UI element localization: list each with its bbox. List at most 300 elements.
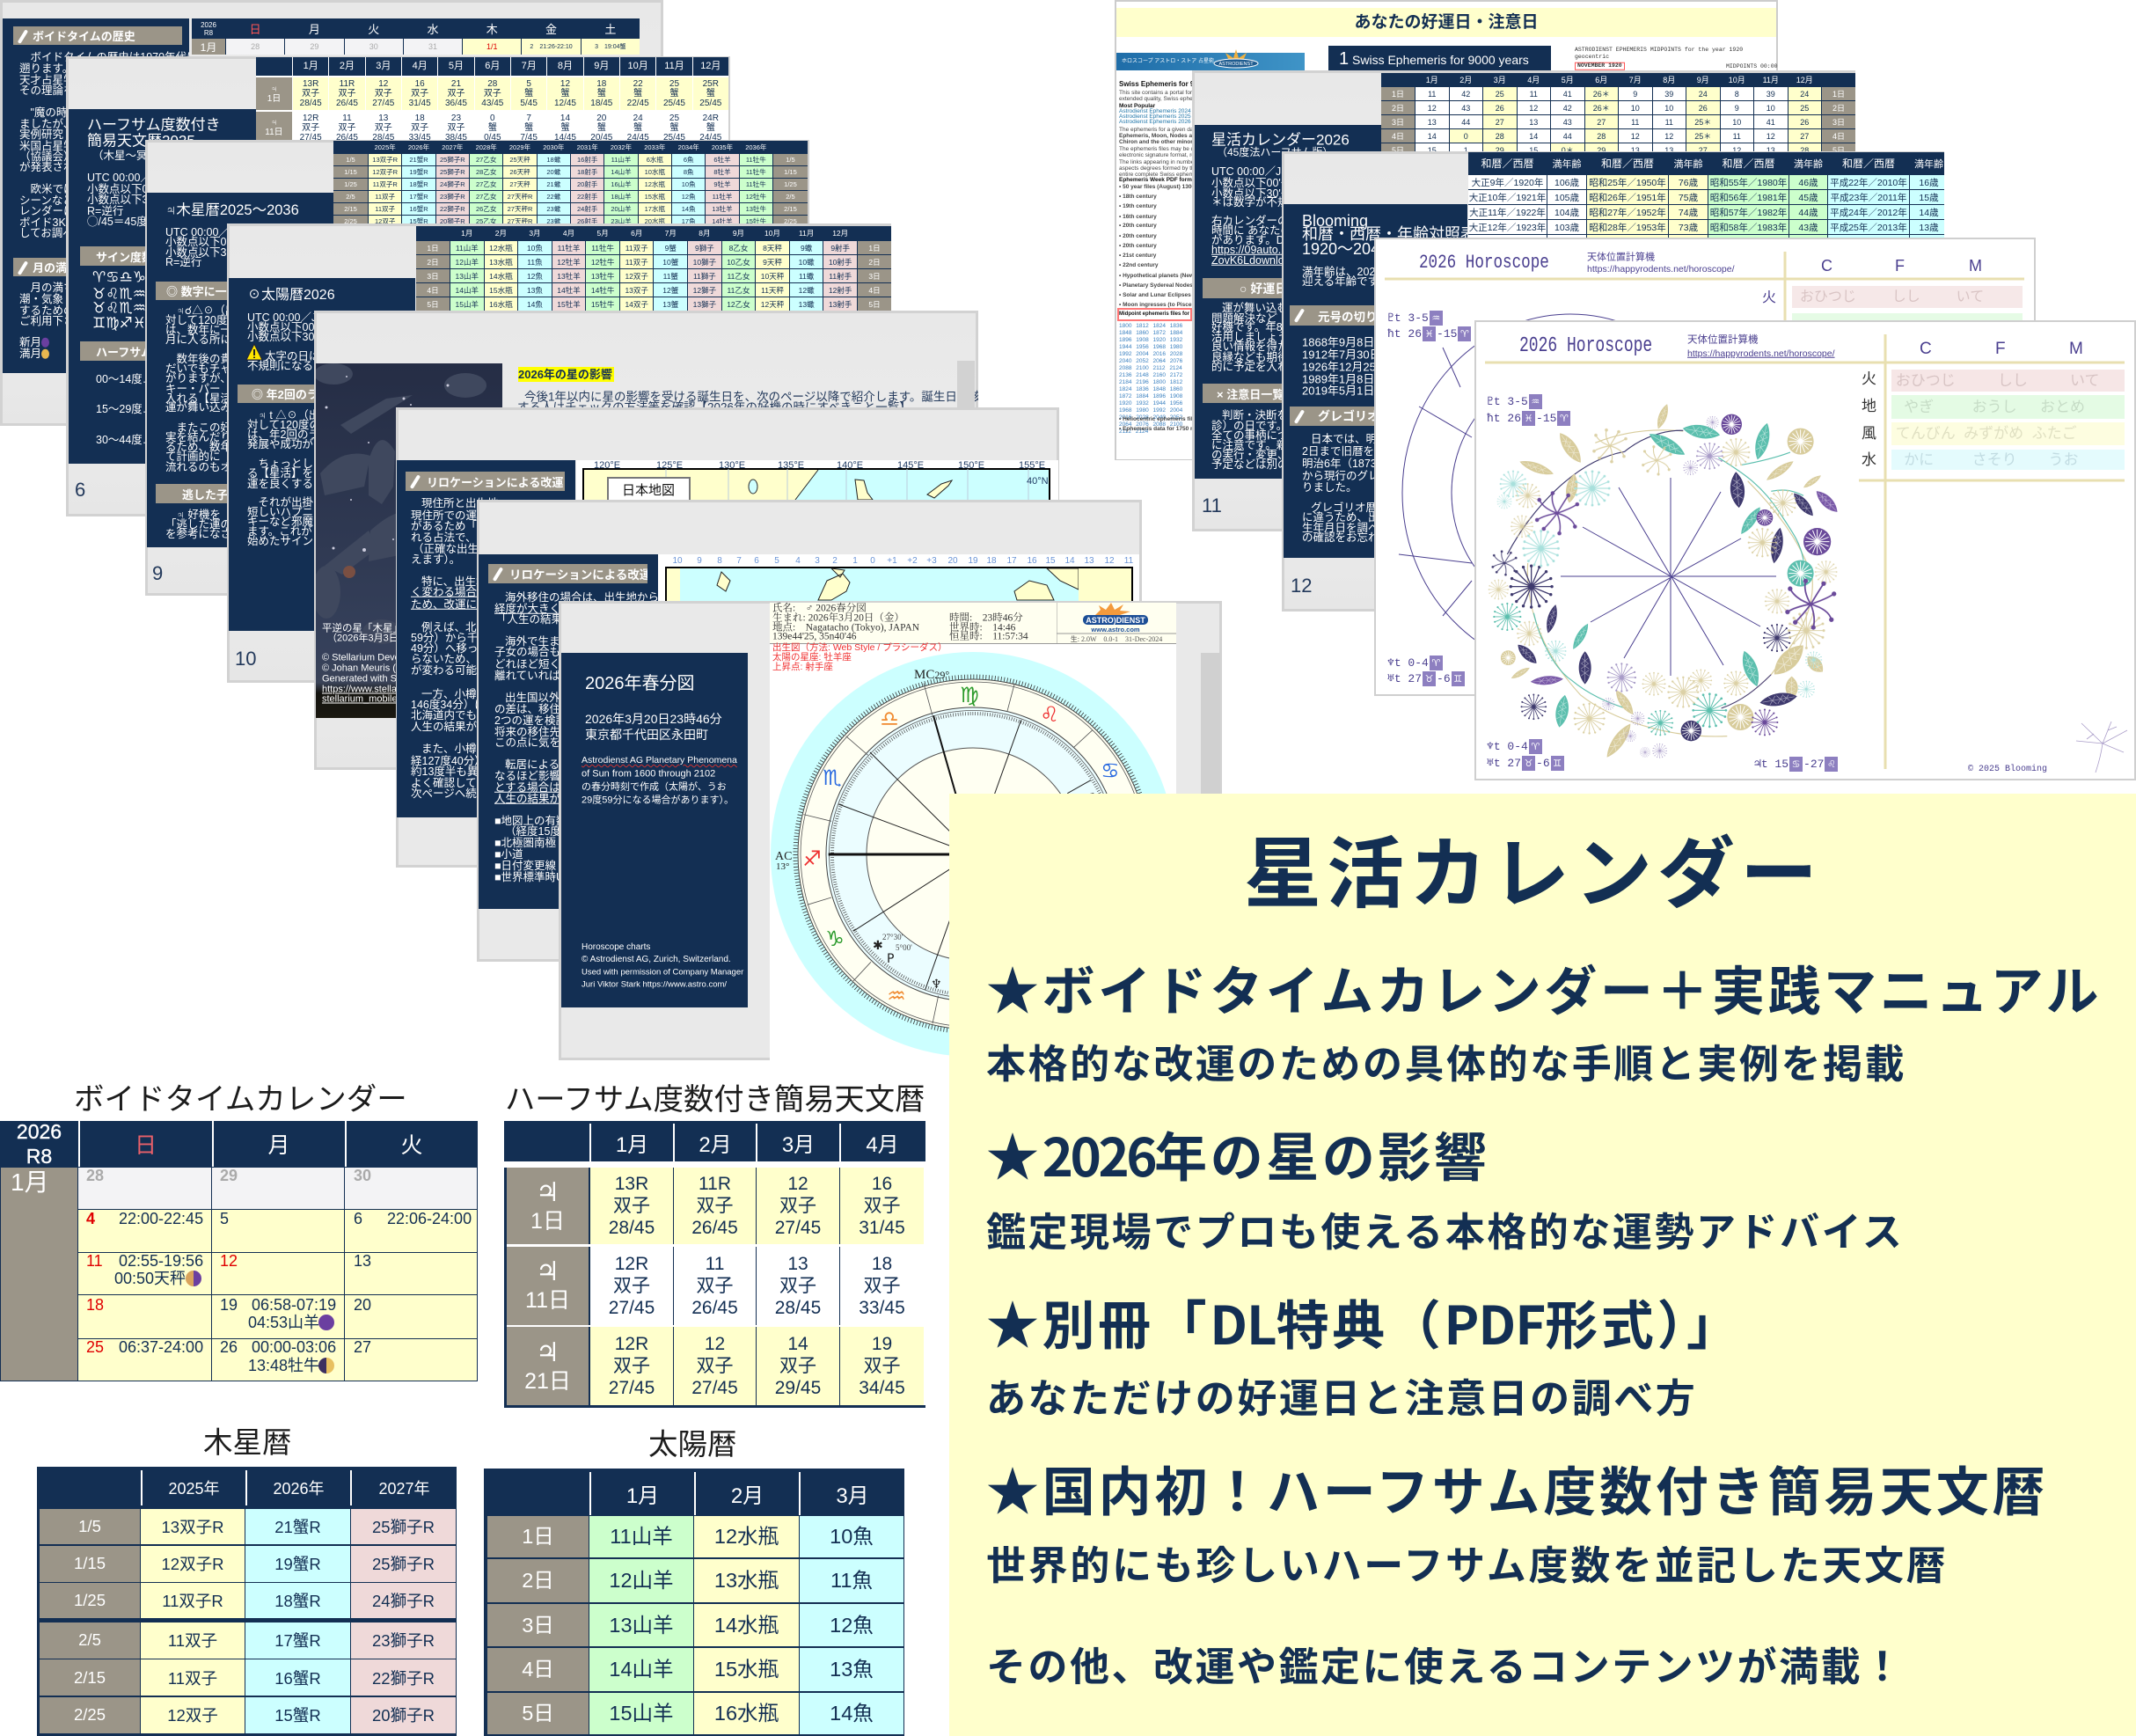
label: F: F [1895, 257, 1905, 275]
panel: activity calendar text column: （45度法ハーフサム版） [1217, 146, 1333, 158]
calendar thumbnail: 2026 R8 [201, 21, 216, 37]
lucky day table thumbnail: 12月 [1796, 76, 1813, 84]
panel: lucky days sheet: geocentric [1575, 54, 1609, 60]
chart: horoscope wheel: ♋ [1101, 758, 1120, 783]
calendar grid: 1月 [11, 1168, 49, 1196]
web page thumbnail: astrodienst: The ephemeris for a given date contains the right [1119, 127, 1243, 133]
sun table thumbnail: 11牡羊 [558, 243, 580, 252]
heading: half-sum almanac: ハーフサム度数付き簡易天文暦 [505, 1083, 925, 1117]
panel: half-sum text column: ハーフサム度数付き [87, 116, 221, 134]
web page thumbnail: astrodienst: Astrodienst Ephemeris 2025 [1119, 114, 1191, 120]
web page thumbnail: astrodienst: extended quality, Swiss ephemeris files for users of [1119, 96, 1248, 102]
panel: sun text column: 始めたサイン [247, 535, 313, 547]
panel: age conversion text column: 明治6年（1873） [1302, 458, 1387, 470]
calendar thumbnail: 28 [251, 42, 260, 51]
lucky day table thumbnail [1381, 73, 1855, 152]
panel: half-sum text column: ◯/45＝45度法 [87, 216, 158, 228]
lucky day table thumbnail: 8月 [1663, 76, 1675, 84]
panel: half-sum text column: 15～29度… [96, 403, 153, 415]
text: outer planets: ♈ [1460, 328, 1469, 340]
calendar thumbnail: 水 [427, 23, 438, 36]
sun table thumbnail: 13蟹 [662, 299, 678, 308]
table body: 4日 [522, 1658, 554, 1681]
sun table thumbnail: 3日 [427, 271, 439, 280]
jupiter table thumbnail: 28乙女 [476, 168, 496, 176]
panel: activity calendar text column: 時間に あなたの [1211, 224, 1291, 237]
sun table thumbnail: 8月 [699, 229, 710, 238]
web page thumbnail: astrodienst: • Solar and Lunar Eclipses [1119, 292, 1191, 298]
lucky day table thumbnail: 27 [1597, 118, 1606, 127]
heading: relocation world [488, 564, 647, 583]
half-sum table thumbnail: 1月 [304, 61, 318, 71]
panel: horoscope front sheet: https://happyrodents.net/horoscope/ [1687, 348, 1835, 359]
panel: activity calendar text column [1195, 125, 1381, 479]
jupiter table thumbnail: 2028年 [476, 143, 497, 151]
lucky day table thumbnail: 10 [1664, 104, 1673, 113]
panel: spring equinox sheet: 上昇点: 射手座 [772, 662, 833, 672]
lucky day table thumbnail: 41 [1767, 118, 1775, 127]
half-sum table thumbnail: 25 蟹 25/45 [663, 79, 685, 108]
panel: spring equinox sheet [559, 601, 1222, 1060]
panel: 2026 star influence sheet: Generated with Stellarium [322, 674, 434, 685]
age table thumbnail: 平成22年／2010年 [1830, 178, 1907, 188]
table header: 2026年 [273, 1480, 325, 1498]
panel: void time text column: 月の満ち [30, 282, 75, 294]
panel: half-sum text column: ♉♌♏♒ [92, 285, 146, 303]
calendar thumbnail: 日 [250, 23, 261, 36]
panel: horoscope back sheet: 天体位置計算機 [1587, 252, 1655, 262]
table body [507, 1168, 925, 1405]
heading: sign degrees: サイン度数 [96, 250, 153, 264]
jupiter table thumbnail: 11双子 [375, 205, 395, 213]
age table thumbnail: 106歳 [1554, 178, 1579, 188]
table body: 12 双子 27/45 [691, 1334, 738, 1398]
logo: astrodienst [1057, 603, 1176, 643]
map: world: +2 [907, 556, 918, 566]
age table thumbnail: 大正9年／1920年 [1472, 178, 1543, 188]
table body: 5日 [522, 1702, 554, 1725]
web page thumbnail: astrodienst: • 16th century [1119, 214, 1157, 220]
jupiter table thumbnail: 18射手 [577, 168, 597, 176]
jupiter table thumbnail: 1/5 [346, 156, 355, 164]
heading: lucky day [1203, 278, 1372, 298]
lucky day table thumbnail: 39 [1664, 90, 1673, 99]
sun table thumbnail: 11双子 [625, 257, 648, 266]
chart: horoscope wheel: ♎ [880, 707, 899, 731]
panel: activity calendar text column: 良縁なども期待 [1211, 351, 1289, 363]
logo: astrodienst: www.astro.com [1090, 626, 1140, 634]
panel: void time text column: （協議会） [19, 150, 75, 163]
lucky day table thumbnail: 24 [1699, 90, 1708, 99]
sun table thumbnail: 10獅子 [693, 257, 716, 266]
calendar grid: 火 [400, 1133, 422, 1158]
table body: 12山羊 [609, 1569, 674, 1592]
panel: relocation world text column: ■小道 [494, 848, 523, 861]
half-sum table thumbnail: 13R 双子 28/45 [300, 79, 322, 108]
lucky day table thumbnail: 41 [1563, 90, 1572, 99]
table body: ♃ [536, 1177, 560, 1207]
label: M: M [1969, 257, 1982, 275]
panel: 2026 star influence sheet: する人はチェックの方法等を確認【2026年の好機の時にすべきこと一覧】 [517, 400, 911, 414]
jupiter table thumbnail: 2/25 [784, 217, 797, 225]
chart: horoscope wheel: ♆ [931, 978, 942, 992]
panel: spring equinox sheet: 出生図（方法: Web Style / プラシーダス） [772, 642, 947, 653]
panel: half-sum text column: ♈♋♎♑ [92, 269, 146, 287]
sun table thumbnail: 16水瓶 [489, 299, 513, 308]
panel: equinox text column: Juri Viktor Stark https://www.astro.com/ [582, 979, 727, 989]
map: world: 18 [986, 556, 997, 566]
sun table thumbnail: 12月 [832, 229, 848, 238]
map: world: 1 [852, 556, 858, 566]
lucky day table thumbnail: 1日 [1392, 90, 1404, 99]
sun table thumbnail: 3日 [868, 271, 881, 280]
panel: jupiter almanac table [37, 1467, 457, 1736]
chart: horoscope wheel: 5°00' [896, 943, 912, 952]
panel: activity calendar text column: 好機です。年8回 [1211, 321, 1293, 333]
panel: age conversion text column: 1912年7月30日 [1302, 348, 1381, 361]
jupiter table thumbnail: 2036年 [745, 143, 766, 151]
text: slow planets: ♆t 0-4 ♅t 27 -6 [1487, 740, 1550, 770]
table header: 2027年 [378, 1480, 430, 1498]
jupiter table thumbnail: 20蠍 [546, 168, 560, 176]
jupiter table thumbnail: 13双子R [372, 156, 398, 164]
map: japan: 150°E [958, 460, 984, 471]
lucky day table thumbnail: 28 [1496, 132, 1504, 141]
table body: 12 双子 27/45 [775, 1174, 821, 1238]
calendar thumbnail: 30 [369, 42, 378, 51]
map: world [658, 554, 1139, 601]
lucky day table thumbnail: 14 [1428, 132, 1437, 141]
title: star activity calendar: 星活カレンダー [1244, 812, 1823, 924]
page number: 9 [152, 562, 163, 584]
lucky day table thumbnail: 26 [1800, 118, 1809, 127]
map: world: +3 [926, 556, 937, 566]
lucky day table thumbnail: 4月 [1527, 76, 1540, 84]
band: earth signs [1792, 313, 2023, 324]
panel: sun almanac sheet [227, 223, 891, 683]
lucky day table thumbnail: 11 [1733, 132, 1741, 141]
sun table thumbnail: 1日 [427, 243, 439, 252]
heading: lucky day: ○ 好運日 [1240, 282, 1287, 296]
logo: astrodienst: ASTRO)DIENST [1086, 616, 1145, 625]
panel: void time text column: するための [19, 304, 75, 317]
jupiter table thumbnail: 12魚 [682, 193, 696, 201]
table body: 15山羊 [609, 1702, 674, 1725]
sun table thumbnail: 11双子 [625, 243, 648, 252]
calendar thumbnail: 1/1 [486, 42, 498, 51]
age table thumbnail: 74歳 [1679, 208, 1698, 218]
panel: age conversion sheet [1282, 151, 1944, 612]
panel: equinox text column: of Sun from 1600 through 2102 [582, 769, 715, 780]
panel: half-sum text column: 小数点以下30'～ [87, 194, 167, 206]
calendar thumbnail: 3 19:04蟹 [595, 44, 626, 50]
text: star influence body [517, 390, 978, 414]
table body: 23獅子R [372, 1631, 435, 1650]
half-sum table thumbnail: ♃ 1日 [267, 84, 281, 104]
panel: void time text column: "魔の時間" [30, 106, 82, 119]
panel: jupiter text column: キー・パー（ [165, 383, 231, 395]
lucky day table thumbnail: 13 [1428, 118, 1437, 127]
panel: relocation text column: らないため、引越 [411, 653, 499, 665]
panel: jupiter text column: ♃ 好機を [176, 509, 221, 521]
sun table thumbnail: 5月 [596, 229, 609, 238]
web page thumbnail: astrodienst: This site contains a portal for the download files in [1119, 90, 1246, 96]
sun table thumbnail: 6月 [631, 229, 642, 238]
panel: relocation world text column: 海外で生まれた [505, 635, 582, 648]
jupiter table thumbnail: 2026年 [408, 143, 429, 151]
panel: void time calendar table: 4 [86, 1210, 95, 1227]
sun table thumbnail: 14双子 [625, 299, 648, 308]
panel: activity calendar text column: 良い情報を得た [1211, 341, 1289, 353]
chart: blank horoscope wheel [1399, 313, 1615, 641]
jupiter table thumbnail: 23獅子R [440, 193, 465, 201]
lucky day table thumbnail: 13 [1529, 118, 1538, 127]
panel: age conversion text column: 1868年9月8日 [1302, 336, 1374, 348]
half-sum table thumbnail: 3月 [376, 61, 391, 71]
jupiter table thumbnail: 22蠍 [546, 193, 560, 201]
table body: 11 双子 26/45 [691, 1253, 738, 1318]
table header [37, 1470, 457, 1505]
panel: jupiter text column: ♃木星暦2025～2036 [165, 202, 299, 218]
panel: activity calendar text column: 活用しましょう。 [1211, 331, 1298, 343]
table body: 11双子 [168, 1668, 217, 1688]
lucky day table thumbnail: 42 [1461, 90, 1470, 99]
text: slow planets: ♊ [1453, 673, 1462, 685]
age table thumbnail: 104歳 [1554, 208, 1579, 218]
panel: jupiter text column: て計画的に [165, 450, 221, 463]
sun table thumbnail: 8乙女 [729, 243, 748, 252]
panel: equinox text column: Horoscope charts [582, 942, 650, 952]
panel: half-sum text column: UTC 00:00／JST 09:00 [87, 172, 201, 184]
age table thumbnail: 平成23年／2011年 [1831, 192, 1906, 202]
web page thumbnail: astrodienst: Astrodienst Ephemeris 2026 [1119, 119, 1191, 125]
map: world: 15 [1045, 556, 1056, 566]
sun table thumbnail: 15牡羊 [557, 299, 581, 308]
age table thumbnail: 満年齢 [1794, 158, 1823, 169]
lucky day table thumbnail: 11 [1631, 118, 1639, 127]
panel: relocation world text column: 将来の移住先など [494, 726, 582, 738]
jupiter table thumbnail: 1/25 [344, 180, 357, 188]
jupiter table thumbnail: 23蠍 [546, 217, 560, 225]
table body: 11双子R [162, 1592, 223, 1610]
chart: horoscope wheel: ✱ [873, 939, 883, 953]
map: world: 5 [774, 556, 779, 566]
heading: moon [13, 258, 182, 276]
table body: 12双子R [162, 1555, 223, 1573]
web page thumbnail: astrodienst: Most Popular [1119, 103, 1155, 109]
jupiter table thumbnail: 25獅子R [440, 156, 465, 164]
lucky day table thumbnail: 11 [1428, 90, 1436, 99]
sun table thumbnail: 10乙女 [727, 257, 750, 266]
jupiter table thumbnail: 1/5 [786, 156, 795, 164]
heading: missed luck: 逃した子 [182, 487, 228, 502]
panel: age conversion text column: グレゴリオ暦の [1311, 502, 1388, 514]
panel: jupiter text column: 小数点以下00'～ [165, 236, 245, 248]
age table thumbnail: 73歳 [1679, 222, 1698, 232]
sun table thumbnail: 10射手 [829, 257, 852, 266]
age table thumbnail: 45歳 [1798, 192, 1818, 202]
lucky day table thumbnail: 25 [1496, 90, 1504, 99]
table body: 16水瓶 [714, 1702, 779, 1725]
sun table thumbnail: 9射手 [830, 243, 850, 252]
chart: horoscope wheel: ♌ [1040, 702, 1059, 727]
table body: 2/5 [78, 1630, 101, 1649]
panel: void time calendar table: 11 [86, 1252, 103, 1270]
jupiter table thumbnail: 11山羊 [611, 156, 631, 164]
jupiter table thumbnail: 17魚 [682, 217, 696, 225]
jupiter table thumbnail: 26射手 [577, 217, 597, 225]
feature heading 3: ★別冊「DL特典（PDF形式）」 [986, 1284, 1743, 1360]
panel: void time calendar table: 29 [220, 1167, 238, 1184]
heading: twice yearly: ◎ 年2回のラッキー [252, 388, 353, 401]
jupiter table thumbnail: 18山羊 [611, 193, 632, 201]
panel: relocation world text column [479, 554, 658, 909]
lucky day table thumbnail: 8 [1735, 90, 1739, 99]
panel: void time calendar table: 02:55-19:56 [119, 1252, 203, 1270]
table header: 2月 [731, 1484, 764, 1508]
jupiter table thumbnail: 1/25 [784, 180, 797, 188]
panel: relocation world text column: どれほど短くても [494, 658, 582, 670]
panel: horoscope front sheet: 天体位置計算機 [1687, 334, 1758, 345]
lucky day table thumbnail: 26 [1496, 104, 1504, 113]
table body: 13双子R [162, 1518, 223, 1536]
jupiter table thumbnail: 11牡羊 [713, 193, 732, 201]
heading: moon: 月の満ち欠け [33, 261, 101, 275]
table body: ♃ [536, 1256, 560, 1287]
half-sum table thumbnail: 28 双子 43/45 [481, 79, 503, 108]
web page thumbnail: astrodienst: ホロスコープ アストロ・ストア 占星術 [1122, 59, 1214, 64]
panel: sun text column: る【星活】を [247, 467, 313, 480]
panel: half-sum text column: 00～14度… [96, 373, 153, 385]
text: outer planets: ♇t 3-5 ħt 26 -15 [1387, 311, 1457, 341]
sun table thumbnail: 12蠍 [799, 285, 815, 294]
panel: sun text column: UTC 00:00／JST 09:00 [247, 311, 362, 324]
map: japan: 140°E [837, 460, 863, 471]
heading: sun almanac: 太陽暦 [648, 1429, 737, 1461]
icon: waxing moon [186, 1271, 201, 1286]
lucky day table thumbnail: 43 [1563, 118, 1572, 127]
panel: age conversion text column: 2019年5月1日 [1302, 384, 1374, 398]
calendar grid: 日 [135, 1133, 157, 1158]
label: fire: 火 [1862, 372, 1876, 389]
sun table thumbnail: 4月 [563, 229, 574, 238]
half-sum table thumbnail: 12月 [700, 61, 721, 71]
lucky day table thumbnail: 12 [1664, 132, 1673, 141]
panel: relocation text column: 146度34分）に転 [411, 699, 496, 711]
panel: sun text column: 発展や成功が [247, 438, 313, 450]
calendar thumbnail: 土 [604, 23, 616, 36]
map: japan: 125°E [656, 460, 683, 471]
table body: 1/15 [74, 1554, 106, 1572]
jupiter table thumbnail: 14魚 [682, 205, 696, 213]
panel: sun text column: ☉太陽暦2026 [247, 288, 335, 303]
text: jupiter transit: ♃t 15 -27 [1754, 758, 1824, 771]
web page thumbnail: astrodienst: entire complete Swiss ephemeris data for planets [1119, 172, 1244, 178]
lucky day table thumbnail: 2日 [1832, 104, 1845, 113]
lucky day table thumbnail: 24 [1800, 90, 1809, 99]
jupiter table thumbnail: 2/15 [344, 205, 357, 213]
sun table thumbnail: 13魚 [527, 285, 543, 294]
jupiter table thumbnail: 19蟹R [409, 168, 428, 176]
map: japan: 145°E [897, 460, 924, 471]
panel: activity calendar text column: 星活カレンダー2026 [1211, 132, 1350, 148]
divider lines [1385, 252, 2024, 320]
table body: 13R 双子 28/45 [609, 1174, 655, 1238]
map: world: 11 [1124, 556, 1134, 566]
map: world: 14 [1064, 556, 1075, 566]
table body: 14 双子 29/45 [775, 1334, 821, 1398]
panel: relocation text column: 一方、小樽市で [421, 688, 499, 700]
jupiter table thumbnail: 23山羊 [611, 217, 632, 225]
lucky day table thumbnail: 12 [1767, 132, 1775, 141]
heading: void time calendar: ボイドタイムカレンダー [74, 1083, 407, 1117]
sun table thumbnail: 11乙女 [728, 285, 750, 294]
table body: 12R 双子 27/45 [609, 1253, 655, 1318]
sun table thumbnail: 9獅子 [695, 243, 714, 252]
map: world: 12 [1104, 556, 1115, 566]
map: japan: 120°E [594, 460, 620, 471]
table header: 3月 [836, 1484, 869, 1508]
age table thumbnail [1468, 152, 1944, 240]
lucky day table thumbnail: 0 [1464, 132, 1468, 141]
panel: void time text column: が発表され [19, 161, 75, 173]
web page thumbnail: astrodienst: The ephemeris files may be downloaded and are [1119, 146, 1243, 152]
table body: 2/25 [74, 1705, 106, 1724]
panel: activity calendar text column: 診）の日です。 [1211, 420, 1287, 432]
age table thumbnail: 14歳 [1919, 208, 1939, 218]
calendar thumbnail: 1月 [201, 40, 216, 53]
jupiter table thumbnail: 2/5 [346, 193, 355, 201]
panel: relocation text column: く変わる場合、人 [411, 586, 499, 598]
jupiter table thumbnail: 2025年 [375, 143, 396, 151]
table body: 15水瓶 [714, 1658, 779, 1681]
lucky day table thumbnail: 10 [1732, 118, 1741, 127]
panel: void time text column: 潮・気象・ [19, 293, 75, 305]
jupiter table thumbnail: 2035年 [712, 143, 733, 151]
panel: relocation world text column: ■世界標準時UT [494, 871, 571, 883]
panel: relocation text column: よく確認しておく [411, 777, 498, 789]
age table thumbnail: 13歳 [1919, 222, 1939, 232]
panel: lucky days sheet: ASTRODIENST EPHEMERIS MIDPOINTS for the year 1920 [1575, 47, 1743, 53]
panel: 2026 star influence sheet: 平逆の星「木星」と [322, 623, 413, 634]
web page thumbnail: astrodienst: • Heliocentric ephemeris files for selected [1119, 416, 1233, 422]
table body: 14山羊 [609, 1658, 674, 1681]
calendar cell text [86, 1167, 472, 1374]
sun table thumbnail: 14魚 [527, 299, 543, 308]
table body [487, 1516, 904, 1734]
table header [484, 1472, 904, 1515]
table header: 2月 [699, 1133, 732, 1157]
panel: equinox text column: © Astrodienst AG, Zurich, Switzerland. [582, 955, 731, 964]
panel: sun text column: 対して120度の [247, 419, 320, 431]
lucky day table thumbnail: 12 [1631, 132, 1640, 141]
table body: ♃ [536, 1337, 560, 1367]
panel: lucky days sheet: NOVEMBER 1920 [1577, 62, 1622, 69]
sun table thumbnail: 10魚 [527, 243, 543, 252]
panel: yellow feature summary [949, 794, 2136, 1736]
table body: 18蟹R [274, 1592, 321, 1610]
panel: spring equinox sheet: 太陽の星座: 牡羊座 [772, 652, 852, 663]
band: water signs: かに さそり うお [1904, 451, 2079, 468]
panel: relocation text column: 次ページへ続く [411, 787, 487, 800]
closing text: その他、改運や鑑定に使えるコンテンツが満載！ [986, 1635, 1905, 1692]
chart: horoscope wheel: ♐ [802, 846, 822, 871]
panel: age conversion text column: 満年齢は、2026年に [1302, 266, 1403, 278]
jupiter table thumbnail: 2/5 [786, 193, 795, 201]
jupiter table thumbnail: 25乙女 [476, 217, 496, 225]
jupiter table thumbnail: 16山羊 [611, 180, 632, 188]
heading: 2026 horoscope: 2026 Horoscope [1519, 334, 1652, 358]
